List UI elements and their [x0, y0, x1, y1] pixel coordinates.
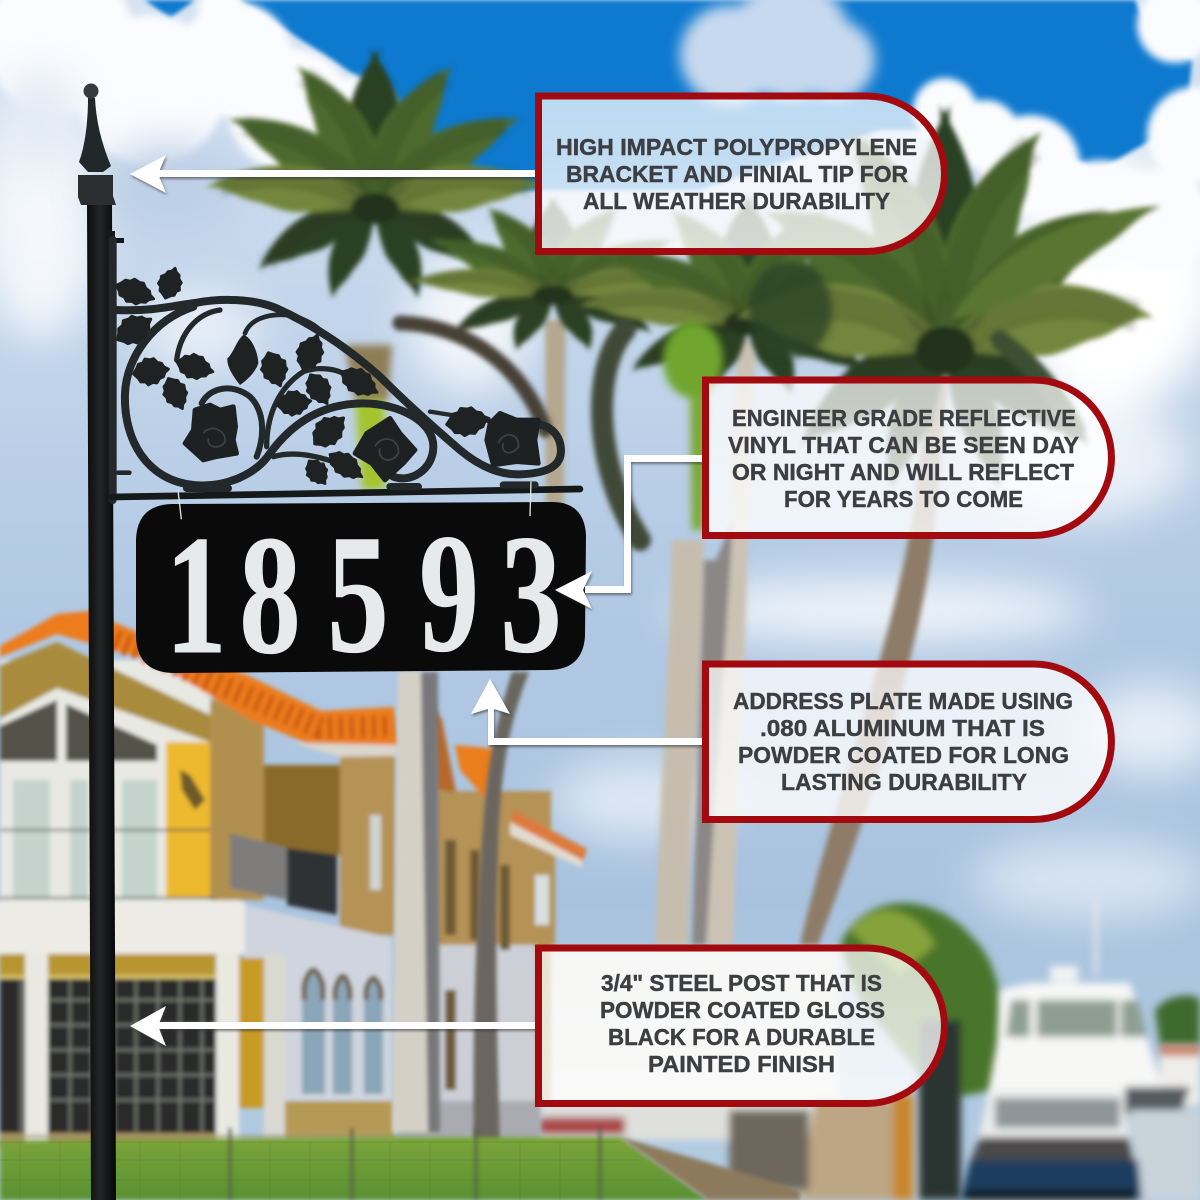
house number: 1 [165, 502, 227, 690]
callout: address plate [706, 664, 1111, 820]
post with finial [78, 84, 124, 1200]
callout text: POWDER COATED GLOSS [600, 997, 885, 1023]
arrow: reflective vinyl callout [555, 455, 704, 609]
callout text: LASTING DURABILITY [781, 769, 1027, 795]
bright leaf clusters [345, 262, 832, 530]
callout text: ALL WEATHER DURABILITY [583, 188, 890, 214]
callout text: FOR YEARS TO COME [784, 486, 1023, 512]
callout: reflective vinyl [706, 380, 1111, 536]
callout text: ADDRESS PLATE MADE USING [733, 688, 1073, 714]
callout text: .080 ALUMINUM THAT IS [760, 715, 1045, 741]
address plate [136, 498, 586, 690]
decorative bracket [111, 240, 580, 519]
arched windows [302, 970, 383, 1094]
boats [960, 895, 1200, 1200]
callout text: OR NIGHT AND WILL REFLECT [732, 459, 1074, 485]
house [0, 611, 587, 1147]
trunks [545, 320, 952, 945]
rose leaves [111, 264, 491, 490]
far harbour trees, building and dock [540, 903, 1200, 1200]
arrow: steel post callout [130, 1006, 537, 1046]
rose bud [227, 335, 258, 385]
steel post [87, 204, 116, 1200]
house number [165, 498, 562, 690]
callout: steel post [538, 948, 944, 1104]
callout text [600, 970, 885, 1077]
callout text [728, 405, 1079, 512]
callout: bracket and finial [538, 96, 944, 252]
callout text: BLACK FOR A DURABLE [608, 1024, 875, 1050]
hanger hooks [178, 482, 531, 519]
arrow: address plate callout [471, 679, 704, 745]
house number: 8 [239, 502, 301, 690]
callout text: ENGINEER GRADE REFLECTIVE [732, 405, 1076, 431]
bracket frame and scrolls [112, 240, 580, 500]
callout text [733, 688, 1073, 795]
post cap [78, 175, 116, 205]
arrow: bracket and finial callout [130, 155, 537, 193]
crowns [204, 48, 1169, 540]
callout text: 3/4" STEEL POST THAT IS [601, 970, 882, 996]
palm trees [204, 48, 1169, 945]
house number: 3 [500, 501, 562, 689]
plate panel [136, 502, 586, 673]
house number: 5 [327, 501, 389, 689]
house number: 9 [419, 498, 479, 687]
foreground palm trunks [392, 672, 529, 1155]
rose petal detail [203, 428, 518, 460]
callout text: VINYL THAT CAN BE SEEN DAY [728, 432, 1079, 458]
callout text [556, 134, 917, 214]
callout text: BRACKET AND FINIAL TIP FOR [566, 161, 908, 187]
roof tiles [0, 611, 398, 745]
callout text: POWDER COATED FOR LONG [738, 742, 1069, 768]
clouds [0, 0, 1200, 270]
callout text: PAINTED FINISH [648, 1051, 835, 1077]
finial ball [84, 84, 98, 98]
callout text: HIGH IMPACT POLYPROPYLENE [556, 134, 917, 160]
finial tip [79, 98, 111, 172]
lawn and fence [0, 1128, 800, 1200]
roses [185, 405, 538, 480]
